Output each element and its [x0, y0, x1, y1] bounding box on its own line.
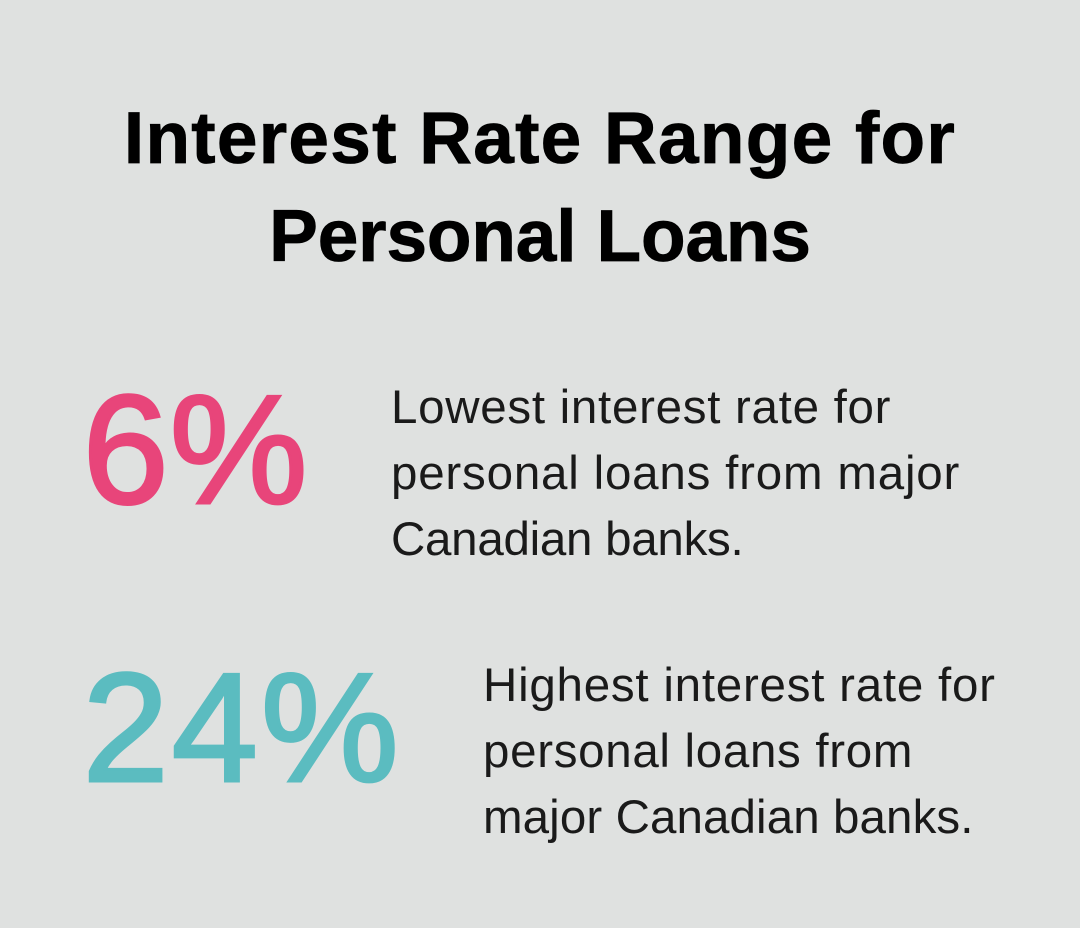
stat description: lowest: Canadian banks.: [391, 513, 743, 566]
stat description: highest: personal loans from: [483, 725, 913, 778]
stat description: highest: [483, 659, 996, 844]
stat number: 24%: 24%: [82, 641, 402, 814]
stat number: 6%: 6%: [82, 363, 309, 536]
stat: 6% lowest rate: [82, 363, 960, 566]
stat description: lowest: [391, 381, 960, 566]
stat description: highest: major Canadian banks.: [483, 791, 974, 844]
stat: 24% highest rate: [82, 641, 996, 844]
stat description: lowest: personal loans from major: [391, 447, 960, 500]
title: [124, 98, 956, 277]
stat description: lowest: Lowest interest rate for: [391, 381, 891, 434]
title: Interest Rate Range for: [124, 98, 956, 179]
stat description: highest: Highest interest rate for: [483, 659, 996, 712]
title: Personal Loans: [269, 196, 811, 277]
